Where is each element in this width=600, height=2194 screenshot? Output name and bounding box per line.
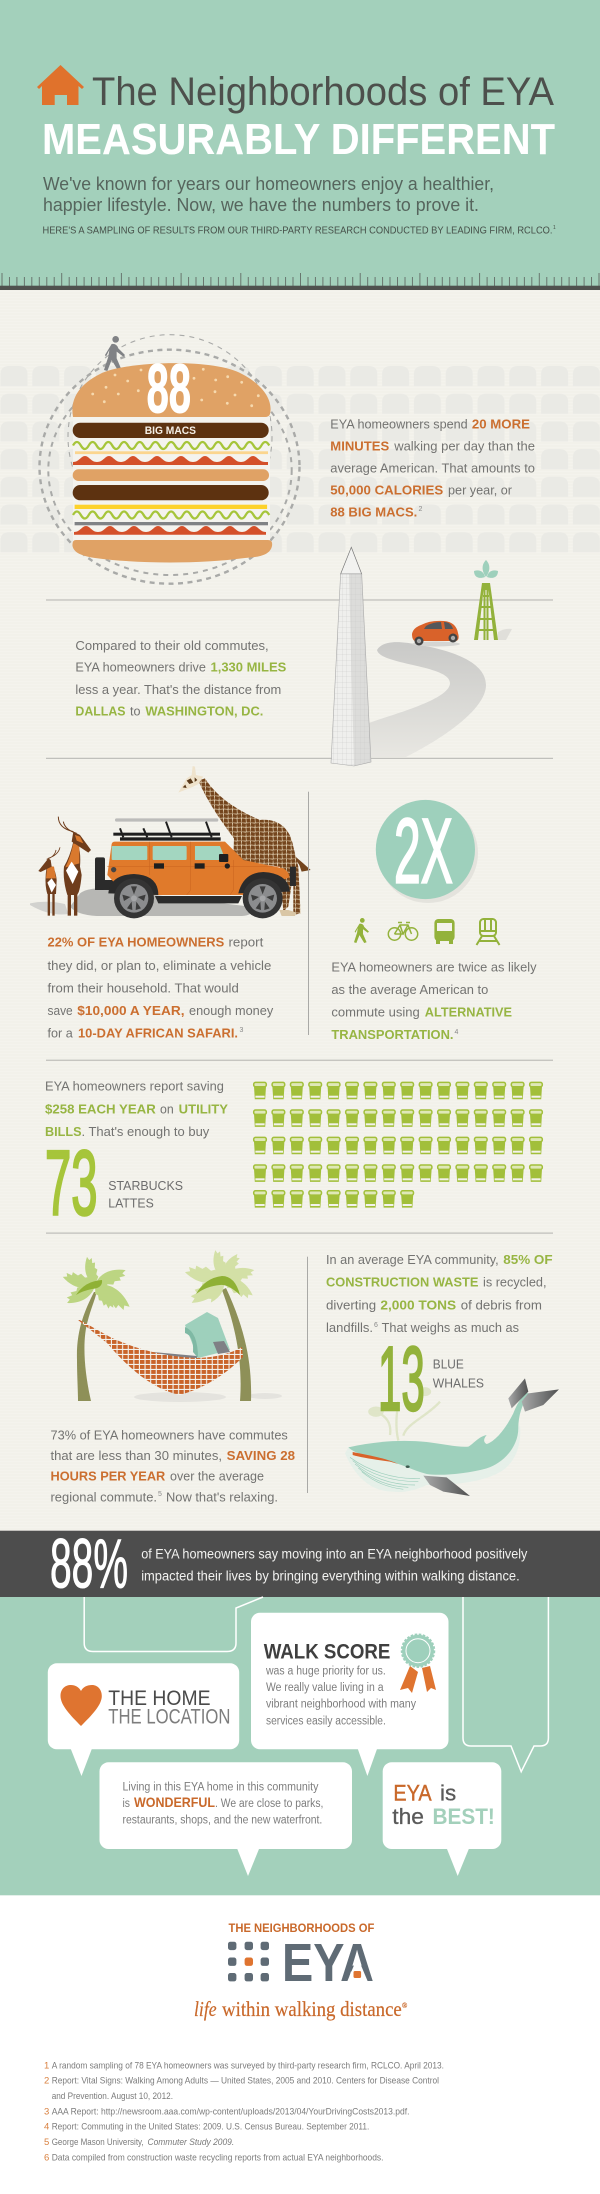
panel: 88 percent band — [0, 1524, 600, 1602]
icon: walker — [354, 918, 369, 943]
panel: alternative transportation — [331, 800, 537, 1042]
bubble text: is — [122, 1798, 130, 1810]
panel: lattes — [45, 1079, 542, 1234]
bubble: walk score — [251, 1613, 448, 1776]
panel: blue whales: 13 — [378, 1329, 425, 1430]
blue whales label: BLUE — [433, 1356, 464, 1371]
illustration: palms and hammock — [61, 1249, 282, 1402]
footnotes: 3 — [44, 2106, 49, 2117]
safari text: 3 — [240, 1027, 244, 1034]
sauce — [75, 451, 268, 454]
heading: WALK SCORE — [264, 1640, 390, 1663]
header intro text: We've known for years our homeowners enjoy a healthier, — [43, 173, 494, 194]
small antelope — [38, 847, 60, 916]
number 88: 88 — [147, 350, 191, 428]
header intro text: happier lifestyle. Now, we have the numbers to prove it. — [43, 194, 479, 215]
onion — [75, 522, 268, 525]
lattes text: EYA homeowners report saving — [45, 1079, 224, 1094]
bubble text: the — [392, 1804, 424, 1829]
number 88%: 88% — [50, 1524, 128, 1602]
bubble text: WONDERFUL — [134, 1794, 215, 1810]
road — [369, 642, 486, 757]
hammock text: that are less than 30 minutes, — [50, 1448, 222, 1463]
cups pictogram: 73 cups — [254, 1082, 542, 1208]
flukes — [508, 1378, 528, 1408]
recycling text: landfills. — [326, 1320, 373, 1335]
band text: of EYA homeowners say moving into an EYA neighborhood positively — [141, 1547, 528, 1562]
outline speech bubble — [463, 1597, 548, 1772]
miles text: Compared to their old commutes, — [75, 638, 269, 653]
dashed walking circles — [40, 335, 300, 584]
hammock text: Now that's relaxing. — [166, 1490, 278, 1505]
divider — [46, 600, 553, 601]
safari text: 22% OF EYA HOMEOWNERS — [48, 935, 225, 950]
lattes text: UTILITY — [179, 1101, 228, 1116]
hammock — [78, 1319, 243, 1395]
left palm — [61, 1255, 133, 1401]
miles text: to — [130, 704, 140, 719]
lattes text: BILLS — [45, 1124, 82, 1139]
divider — [46, 1233, 553, 1234]
bubble text: THE HOME — [108, 1687, 210, 1710]
large antelope — [58, 817, 91, 916]
footnotes: A random sampling of 78 EYA homeowners was surveyed by third-party research firm, RCLCO. April 2013. — [52, 2060, 444, 2071]
big macs text: MINUTES — [330, 439, 390, 454]
footnotes: Report: Vital Signs: Walking Among Adults — United States, 2005 and 2010. Centers for Disease Control — [52, 2076, 439, 2087]
sesame seeds — [91, 368, 260, 407]
footnotes: Report: Commuting in the United States: 2009. U.S. Census Bureau. September 2011. — [52, 2122, 369, 2133]
ruler — [0, 273, 600, 290]
footnotes: 1 — [44, 2060, 49, 2071]
divider — [46, 758, 332, 759]
panel: hammock — [50, 1249, 295, 1505]
blue whales label: WHALES — [433, 1376, 484, 1391]
miles text: 1,330 MILES — [210, 660, 287, 675]
miles text: less a year. That's the distance from — [75, 682, 281, 697]
icon: bus — [434, 919, 455, 944]
background pattern of faint burgers — [0, 365, 600, 553]
starbucks lattes label: LATTES — [108, 1196, 154, 1211]
spout — [369, 1388, 440, 1441]
big macs text — [330, 417, 535, 519]
second patty — [73, 485, 269, 500]
lattes text: on — [160, 1101, 174, 1116]
shadows — [134, 1392, 282, 1402]
band text — [141, 1547, 528, 1584]
miles text: EYA homeowners drive — [75, 660, 206, 675]
bubble: EYA is the best — [383, 1762, 501, 1876]
bubble text: Living in this EYA home in this community — [122, 1781, 319, 1793]
icon: walker — [104, 336, 125, 371]
recycling text: of debris from — [461, 1297, 542, 1312]
footnotes: 2 — [44, 2076, 49, 2087]
lettuce — [73, 442, 269, 449]
bubble text — [122, 1781, 323, 1827]
divider — [46, 1060, 553, 1061]
jeep shadow — [70, 888, 252, 916]
patty with label: BIG MACS — [145, 425, 196, 437]
blue whales label — [433, 1356, 484, 1391]
tagline: within walking distance — [222, 1997, 402, 2021]
transportation text: commute using — [331, 1005, 420, 1020]
recycling text: 6 — [374, 1322, 378, 1329]
hammock text — [50, 1427, 295, 1505]
big macs text: per year, or — [448, 483, 513, 498]
safari text: enough money — [189, 1003, 274, 1018]
logo dots — [228, 1942, 269, 1981]
header intro text — [43, 173, 494, 215]
badge: 2X — [376, 800, 478, 903]
icon: monument — [331, 547, 371, 766]
bubble text: EYA — [393, 1781, 432, 1806]
top bun — [72, 363, 271, 417]
lattes text — [45, 1079, 228, 1139]
big macs text: 20 MORE — [472, 417, 530, 432]
safari text: $10,000 A YEAR, — [77, 1003, 184, 1018]
patty with label — [73, 423, 269, 438]
panel: miles — [75, 547, 512, 766]
icon: car — [412, 621, 460, 646]
eye — [406, 1465, 410, 1468]
bubble text: . We are close to parks, — [215, 1798, 323, 1810]
bubble text: vibrant neighborhood with many — [266, 1699, 416, 1711]
cheese — [75, 505, 267, 509]
badge: 2X: 2X — [394, 801, 453, 903]
outline speech bubble — [84, 1597, 263, 1652]
safari text: 10-DAY AFRICAN SAFARI. — [78, 1025, 238, 1040]
recycling text: CONSTRUCTION WASTE — [326, 1275, 479, 1290]
footnotes: 5 — [44, 2137, 49, 2148]
bottom bun — [72, 540, 272, 562]
header sampling note: HERE'S A SAMPLING OF RESULTS FROM OUR THIRD-PARTY RESEARCH CONDUCTED BY LEADING FIRM, RCLCO. — [42, 225, 552, 236]
bubble text — [108, 1687, 230, 1729]
band text: impacted their lives by bringing everything within walking distance. — [141, 1569, 520, 1584]
baleen — [353, 1452, 398, 1464]
second lettuce — [73, 512, 269, 518]
jeep — [95, 818, 296, 918]
transportation text: EYA homeowners are twice as likely — [331, 960, 537, 975]
bubble text: THE LOCATION — [108, 1706, 230, 1729]
recycling text: diverting — [326, 1297, 376, 1312]
bubble text: is — [440, 1781, 456, 1806]
safari text: from their household. That would — [48, 980, 239, 995]
icon: house — [37, 65, 84, 105]
illustration: jeep with giraffe and antelopes — [30, 766, 311, 918]
hammock text: HOURS PER YEAR — [50, 1469, 166, 1484]
icon: heart — [60, 1685, 102, 1726]
title line one: The Neighborhoods of EYA — [92, 70, 554, 114]
bubble text — [265, 1665, 416, 1727]
hammock text: over the average — [170, 1469, 264, 1484]
hammock text: 5 — [158, 1491, 162, 1498]
safari text: they did, or plan to, eliminate a vehicle — [48, 958, 271, 973]
safari text: save — [48, 1003, 73, 1018]
recycling text: That weighs as much as — [382, 1320, 519, 1335]
panel: blue whales — [326, 1252, 559, 1496]
footnotes — [44, 2060, 444, 2163]
divider — [307, 1257, 308, 1493]
bubble text: was a huge priority for us. — [265, 1665, 386, 1677]
footnotes: Commuter Study 2009. — [148, 2137, 234, 2148]
footnotes: 4 — [44, 2122, 49, 2133]
divider — [308, 792, 309, 1035]
safari text — [48, 935, 274, 1040]
big macs text: 2 — [418, 506, 422, 513]
burger — [72, 350, 272, 562]
panel: safari — [30, 766, 311, 1040]
icon: rosette — [400, 1635, 436, 1693]
safari text: for a — [48, 1025, 73, 1040]
antelope shadow — [30, 902, 68, 914]
bubble: the home the location — [48, 1663, 239, 1776]
footnotes: George Mason University, — [52, 2137, 144, 2148]
footnotes: Data compiled from construction waste recycling reports from actual EYA neighborhoods. — [52, 2152, 383, 2163]
giraffe — [178, 766, 311, 916]
reader legs — [153, 1352, 197, 1360]
flipper — [423, 1476, 470, 1496]
lattes text: $258 EACH YEAR — [45, 1101, 156, 1116]
footnotes: AAA Report: http://newsroom.aaa.com/wp-content/uploads/2013/04/YourDrivingCosts2013.pdf. — [52, 2106, 409, 2117]
panel: testimonials — [0, 1597, 600, 1895]
recycling text: 2,000 TONS — [380, 1297, 457, 1312]
safari text: report — [228, 935, 264, 950]
transportation text: 4 — [454, 1029, 458, 1036]
bubble text: restaurants, shops, and the new waterfront. — [122, 1815, 322, 1827]
newspaper — [185, 1312, 230, 1358]
miles text: WASHINGTON, DC. — [145, 704, 263, 719]
icon: oil derrick — [474, 560, 512, 640]
title line two: MEASURABLY DIFFERENT — [42, 115, 555, 164]
hammock text: regional commute. — [50, 1490, 157, 1505]
starbucks lattes label: STARBUCKS — [108, 1178, 183, 1193]
bubble text — [392, 1781, 495, 1829]
recycling text: is recycled, — [483, 1275, 546, 1290]
bubble text: BEST! — [432, 1804, 495, 1829]
bubble text: We really value living in a — [266, 1682, 384, 1694]
big macs text: 50,000 CALORIES — [330, 483, 444, 498]
lattes text: . That's enough to buy — [82, 1124, 210, 1139]
recycling text: In an average EYA community, — [326, 1252, 499, 1267]
hammock text: SAVING 28 — [227, 1448, 295, 1463]
bubble: wonderful — [100, 1762, 352, 1876]
recycling text: 85% OF — [503, 1252, 553, 1267]
panel: big macs — [40, 335, 535, 584]
big macs text: walking per day than the — [393, 439, 535, 454]
number 73: 73 — [45, 1132, 98, 1234]
tomato — [73, 456, 268, 465]
bubble text: services easily accessible. — [266, 1715, 386, 1727]
logo overline: THE NEIGHBORHOODS OF — [228, 1923, 374, 1935]
big macs text: average American. That amounts to — [330, 461, 535, 476]
miles text — [75, 638, 287, 719]
starbucks lattes label — [108, 1178, 183, 1211]
middle bun — [73, 469, 269, 481]
transportation text: TRANSPORTATION. — [331, 1027, 454, 1042]
panel: header — [0, 0, 600, 290]
big macs text: 88 BIG MACS. — [330, 504, 417, 519]
transportation text: as the average American to — [331, 982, 488, 997]
logo wordmark: EYA — [282, 1933, 374, 1993]
logo: EYA — [194, 1923, 408, 2021]
big macs text: EYA homeowners spend — [330, 417, 468, 432]
illustration: whale — [345, 1378, 559, 1496]
miles text: DALLAS — [75, 704, 126, 719]
hand — [213, 1341, 230, 1354]
header sampling note: 1 — [553, 225, 556, 231]
icon: train — [476, 919, 500, 945]
transportation text — [331, 960, 537, 1042]
footnotes: and Prevention. August 10, 2012. — [52, 2091, 173, 2102]
tagline: ® — [402, 2002, 408, 2010]
throat — [345, 1425, 520, 1492]
transportation text: ALTERNATIVE — [425, 1005, 512, 1020]
recycling text — [326, 1252, 553, 1335]
right palm — [184, 1249, 256, 1401]
second tomato — [74, 526, 266, 535]
hammock text: 73% of EYA homeowners have commutes — [50, 1427, 288, 1442]
icon: bicycle — [388, 922, 418, 940]
tagline: life — [194, 1997, 217, 2021]
footnotes: 6 — [44, 2152, 49, 2163]
body — [348, 1393, 530, 1475]
